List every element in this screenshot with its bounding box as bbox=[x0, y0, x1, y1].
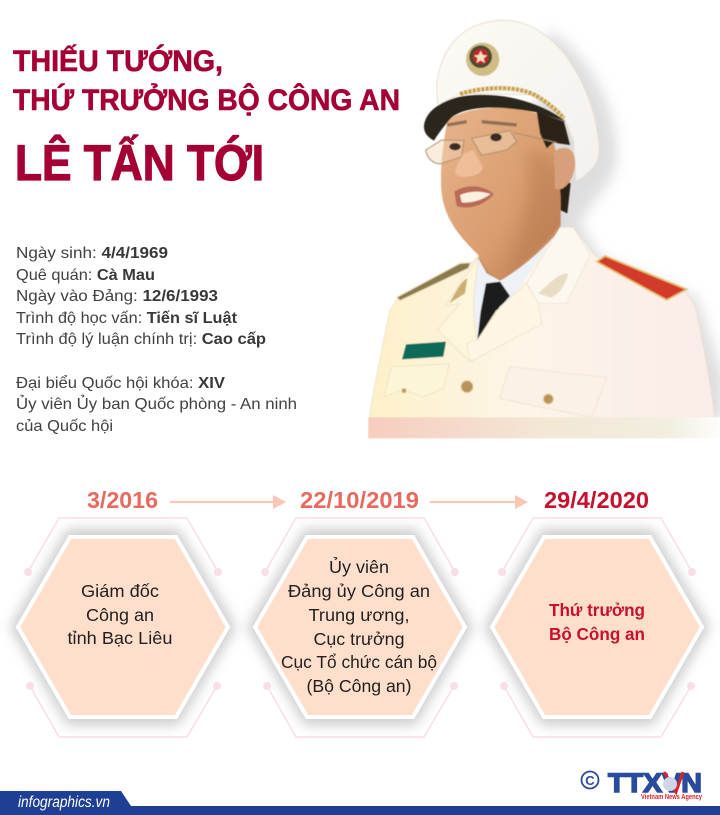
name: LÊ TẤN TỚI bbox=[15, 135, 264, 191]
visor bbox=[424, 95, 566, 141]
hexagon text: Công an bbox=[86, 605, 154, 625]
hexagon text bbox=[68, 581, 172, 648]
hexagon text: Trung ương, bbox=[308, 605, 410, 625]
hair bbox=[537, 112, 570, 148]
copyright mark: C bbox=[585, 773, 595, 788]
left lapel bbox=[437, 257, 542, 362]
face bbox=[441, 108, 561, 281]
neck bbox=[478, 197, 561, 281]
globe mark bbox=[663, 772, 683, 792]
title line 1: THIẾU TƯỚNG, bbox=[13, 44, 223, 78]
hexagon text: Cục Tổ chức cán bộ bbox=[281, 652, 437, 672]
arrow 2 bbox=[430, 495, 528, 509]
panel: hexagon 22/10/2019 bbox=[252, 518, 468, 737]
biography text block bbox=[16, 245, 297, 435]
name tag bbox=[402, 342, 446, 359]
right pocket bbox=[499, 367, 607, 417]
title bbox=[13, 44, 400, 191]
shadow bbox=[489, 533, 705, 721]
footer bar bbox=[0, 791, 720, 815]
hexagon frame lines bbox=[261, 518, 459, 737]
biography text block: của Quốc hội bbox=[16, 418, 113, 435]
eyebrows bbox=[447, 122, 517, 125]
bottom band bbox=[368, 417, 720, 438]
date 3/2016: 3/2016 bbox=[87, 487, 158, 513]
hexagon text: Giám đốc bbox=[81, 581, 159, 601]
collar badge right bbox=[538, 273, 568, 297]
left shoulder board bbox=[397, 263, 471, 301]
ear bbox=[554, 148, 575, 189]
eyes bbox=[449, 133, 502, 150]
biography text block: Ngày sinh: 4/4/1969 bbox=[16, 245, 168, 262]
date 22/10/2019: 22/10/2019 bbox=[300, 487, 419, 513]
collar badge left bbox=[449, 278, 467, 303]
gold braid bbox=[460, 88, 564, 118]
hexagon bbox=[492, 537, 702, 717]
title line 2: THỨ TRƯỞNG BỘ CÔNG AN bbox=[13, 83, 400, 117]
hexagon text: Thứ trưởng bbox=[549, 600, 645, 620]
hexagon bbox=[255, 537, 465, 717]
website label: infographics.vn bbox=[18, 794, 110, 811]
mouth bbox=[454, 186, 494, 208]
hexagon text: Bộ Công an bbox=[549, 624, 645, 644]
arrow 1 bbox=[170, 495, 286, 509]
glasses bbox=[426, 131, 557, 164]
hexagon text: Đảng ủy Công an bbox=[288, 581, 430, 601]
biography text block: Trình độ học vấn: Tiến sĩ Luật bbox=[16, 310, 238, 327]
cap badge bbox=[466, 43, 499, 76]
left pocket bbox=[384, 364, 449, 397]
hexagon text: tỉnh Bạc Liêu bbox=[68, 628, 172, 648]
hexagon text: Cục trưởng bbox=[314, 629, 404, 649]
hair behind ear bbox=[557, 177, 571, 213]
tagline: Vietnam News Agency bbox=[641, 792, 703, 801]
TTXVN wordmark: TTXVN bbox=[608, 768, 702, 798]
soft jaw shading bbox=[518, 150, 560, 258]
photo subject bbox=[369, 20, 715, 421]
biography text block: Ủy viên Ủy ban Quốc phòng - An ninh bbox=[16, 394, 297, 413]
hexagon text bbox=[281, 556, 437, 696]
shirt bbox=[473, 228, 560, 338]
hexagon frame lines bbox=[498, 518, 696, 737]
date 29/4/2020: 29/4/2020 bbox=[544, 487, 649, 513]
hexagon bbox=[18, 537, 228, 717]
hexagon frame lines bbox=[24, 518, 222, 737]
portrait photo illustration bbox=[368, 20, 720, 438]
nose bbox=[455, 150, 483, 177]
buttons bbox=[402, 381, 553, 404]
right collar bbox=[527, 227, 590, 303]
lapel right bbox=[467, 283, 542, 362]
shadow bbox=[15, 533, 231, 721]
hexagon text bbox=[549, 600, 645, 644]
hexagon text: Ủy viên bbox=[329, 556, 389, 577]
biography text block: Quê quán: Cà Mau bbox=[16, 267, 155, 284]
hexagon text: (Bộ Công an) bbox=[306, 676, 412, 696]
TTXVN logo bbox=[582, 768, 703, 801]
biography text block: Đại biểu Quốc hội khóa: XIV bbox=[16, 374, 225, 392]
right shoulder board bbox=[597, 256, 687, 300]
panel: hexagon 29/4/2020 bbox=[489, 518, 705, 737]
panel: hexagon 3/2016 bbox=[15, 518, 231, 737]
biography text block: Trình độ lý luận chính trị: Cao cấp bbox=[16, 331, 266, 348]
cap crown bbox=[437, 20, 599, 182]
tie bbox=[477, 282, 510, 340]
biography text block: Ngày vào Đảng: 12/6/1993 bbox=[16, 288, 218, 305]
jacket bbox=[369, 227, 715, 421]
shadow bbox=[252, 533, 468, 721]
